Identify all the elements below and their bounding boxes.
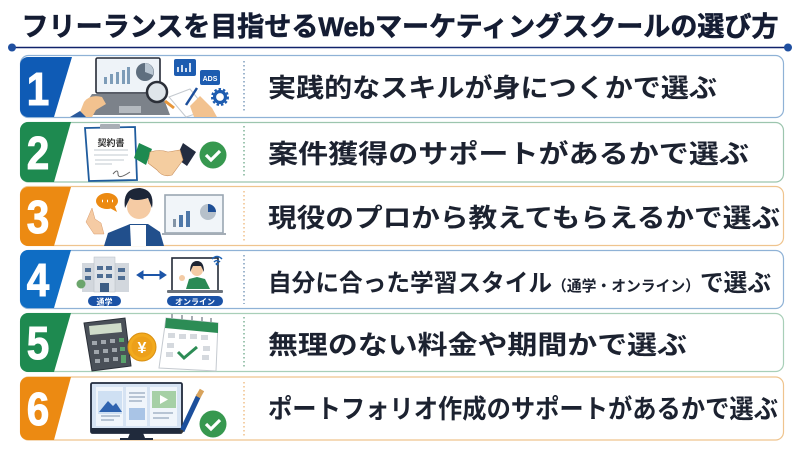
icon: laptop with analytics: ADS <box>203 76 218 83</box>
icon: contract and handshake <box>85 124 226 181</box>
panel: row 4 <box>20 250 784 308</box>
icon: pen <box>180 390 202 434</box>
title: フリーランスを目指せるWebマーケティングスクールの選び方 <box>22 11 778 42</box>
number badge 3 <box>20 187 71 246</box>
panel: row 5 <box>20 313 784 372</box>
icon: yen coin <box>128 333 156 361</box>
number badge 5 <box>20 313 71 372</box>
label: online: オンライン <box>175 298 215 306</box>
text 1: 実践的なスキルが身につくかで選ぶ <box>268 73 717 103</box>
number badge 2: 2 <box>27 129 49 180</box>
label: commute: 通学 <box>96 296 112 306</box>
number badge 4: 4 <box>27 256 49 307</box>
divider <box>243 255 245 304</box>
divider <box>243 191 245 241</box>
number badge 6: 6 <box>27 385 49 436</box>
divider <box>243 126 245 178</box>
text 5: 無理のない料金や期間かで選ぶ <box>268 330 687 360</box>
text 4: 自分に合った学習スタイル（通学・オンライン）で選ぶ <box>268 270 771 297</box>
icon: portfolio monitor <box>91 383 182 440</box>
divider <box>243 317 245 367</box>
icon: yen coin: ¥ <box>138 340 147 357</box>
icon: contract and handshake: 契約書 <box>97 137 125 148</box>
text 6: ポートフォリオ作成のサポートがあるかで選ぶ <box>268 394 778 424</box>
divider <box>243 382 245 436</box>
icon: check mark <box>200 410 226 438</box>
number badge 6 <box>20 377 71 440</box>
text 3: 現役のプロから教えてもらえるかで選ぶ <box>268 203 780 233</box>
number badge 3: 3 <box>27 193 49 244</box>
text 2: 案件獲得のサポートがあるかで選ぶ <box>268 139 749 169</box>
number badge 1: 1 <box>27 65 49 116</box>
arrow: commute and online <box>137 271 166 279</box>
panel: row 6 <box>20 377 784 440</box>
number badge 2 <box>20 122 71 182</box>
icon: calendar with check <box>159 314 218 371</box>
icon: school building <box>76 257 129 292</box>
icon: laptop with analytics <box>70 58 228 117</box>
icon: online lesson <box>167 256 223 293</box>
number badge 5: 5 <box>27 319 49 370</box>
icon: professional presenter <box>86 188 226 246</box>
panel: row 1 <box>20 56 784 118</box>
icon: calculator <box>84 318 131 371</box>
number badge 4 <box>20 250 71 308</box>
title underline <box>8 44 792 52</box>
label: online <box>167 296 223 306</box>
label: commute <box>88 296 121 306</box>
panel: row 3 <box>20 186 784 246</box>
number badge 1 <box>20 57 72 117</box>
divider <box>243 61 245 112</box>
panel: row 2 <box>20 122 784 182</box>
